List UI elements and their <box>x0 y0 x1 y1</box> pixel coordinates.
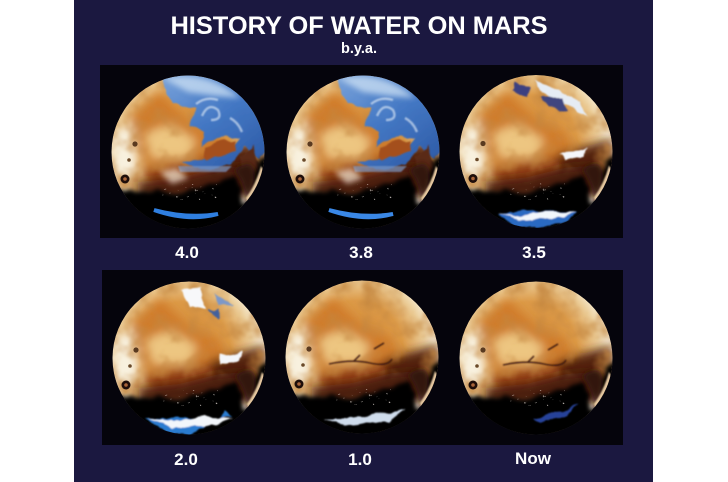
label: 3.5: 3.5 <box>522 243 546 262</box>
south polar ice <box>322 407 406 427</box>
planet: 3.5 b.y.a. <box>460 75 612 228</box>
bright patch near terminator <box>560 148 586 162</box>
north polar water <box>512 80 588 118</box>
north polar water <box>180 288 235 320</box>
subtitle: b.y.a.: b.y.a. <box>341 41 377 57</box>
page background <box>74 0 653 482</box>
planet: 3.8 b.y.a. <box>286 76 440 228</box>
south polar ice <box>497 211 578 229</box>
bright patch near terminator <box>217 352 241 366</box>
planet: 2.0 b.y.a. <box>112 282 266 434</box>
label: Now: Now <box>515 449 552 468</box>
south polar sea <box>329 210 393 217</box>
panel: bottom row background <box>102 270 623 445</box>
label: 1.0: 1.0 <box>348 450 372 469</box>
south polar ice <box>144 410 233 434</box>
panel: top row background <box>100 65 623 238</box>
planet: 1.0 b.y.a. <box>286 280 438 434</box>
title: HISTORY OF WATER ON MARS <box>170 12 548 40</box>
label: 3.8: 3.8 <box>349 243 373 262</box>
planet: now <box>460 282 612 434</box>
label: 2.0: 2.0 <box>174 450 198 469</box>
label: 4.0: 4.0 <box>175 243 199 262</box>
planet: 4.0 b.y.a. <box>112 76 264 228</box>
faint south polar cap <box>533 402 578 424</box>
south polar sea <box>154 210 218 217</box>
